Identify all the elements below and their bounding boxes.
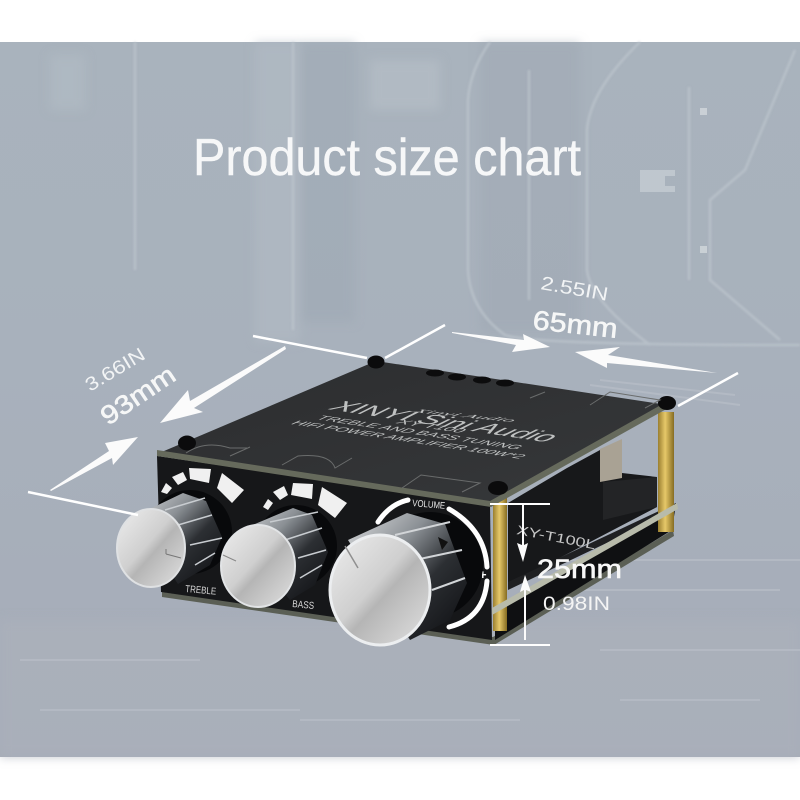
- knob: volume: [330, 512, 483, 645]
- plus sign: +: [479, 567, 487, 582]
- rear interior components: [495, 439, 676, 640]
- middle pcb edge: [492, 503, 678, 615]
- rear brass standoff: [658, 412, 674, 532]
- depth label: millimetres: 93mm: [95, 359, 181, 431]
- dimension: width arrows: [452, 332, 738, 406]
- bass label: BASS: [292, 599, 315, 612]
- volume scale: [378, 500, 487, 627]
- arrow: depth upper: [160, 346, 286, 423]
- height label: millimetres: 25mm: [537, 554, 622, 584]
- top connector holes: [426, 370, 514, 386]
- arrow: depth lower: [50, 437, 138, 491]
- title: Product size chart: [193, 129, 582, 187]
- width extension line: [678, 373, 738, 406]
- amplifier text: HIFI POWER AMPLIFIER 100W*2: [287, 419, 530, 460]
- knob: treble: [117, 490, 232, 587]
- top printed text: [287, 399, 567, 460]
- arrow: width right: [575, 347, 717, 373]
- brand name: XINYI Sini Audio: [321, 399, 567, 445]
- top silkscreen boxes: [186, 392, 660, 492]
- height label: inches: 0.98IN: [543, 594, 610, 615]
- top plate: [157, 361, 668, 505]
- bass scale: [263, 483, 347, 518]
- model number: XY T100: [392, 418, 471, 434]
- depth label: inches: 3.66IN: [82, 344, 149, 396]
- knob: bass: [221, 505, 337, 607]
- width label: millimetres: 65mm: [531, 305, 619, 344]
- device: amplifier board: [117, 356, 678, 645]
- arrow: height down: [517, 505, 528, 562]
- handwritten logo: Xinyi Audio: [407, 408, 521, 423]
- depth extension lines: [28, 325, 445, 515]
- dimension: depth arrows: [28, 325, 445, 515]
- treble label: TREBLE: [185, 584, 217, 598]
- pcb label: XY-T100L: [515, 522, 597, 552]
- volume label: VOLUME: [412, 498, 446, 512]
- arrow: height up: [520, 575, 531, 640]
- top plate edge: [157, 401, 670, 507]
- height extension lines: [490, 504, 550, 645]
- tuning text: TREBLE AND BASS TUNING: [312, 414, 528, 451]
- lower board edge: [162, 530, 674, 645]
- width label: inches: 2.55IN: [539, 273, 610, 306]
- front face panel: [157, 456, 492, 640]
- arrow: width left: [452, 332, 550, 352]
- treble scale: [161, 468, 244, 503]
- dimension: height arrows: [490, 504, 550, 645]
- corner screws: [178, 356, 676, 495]
- front brass standoff: [493, 498, 507, 631]
